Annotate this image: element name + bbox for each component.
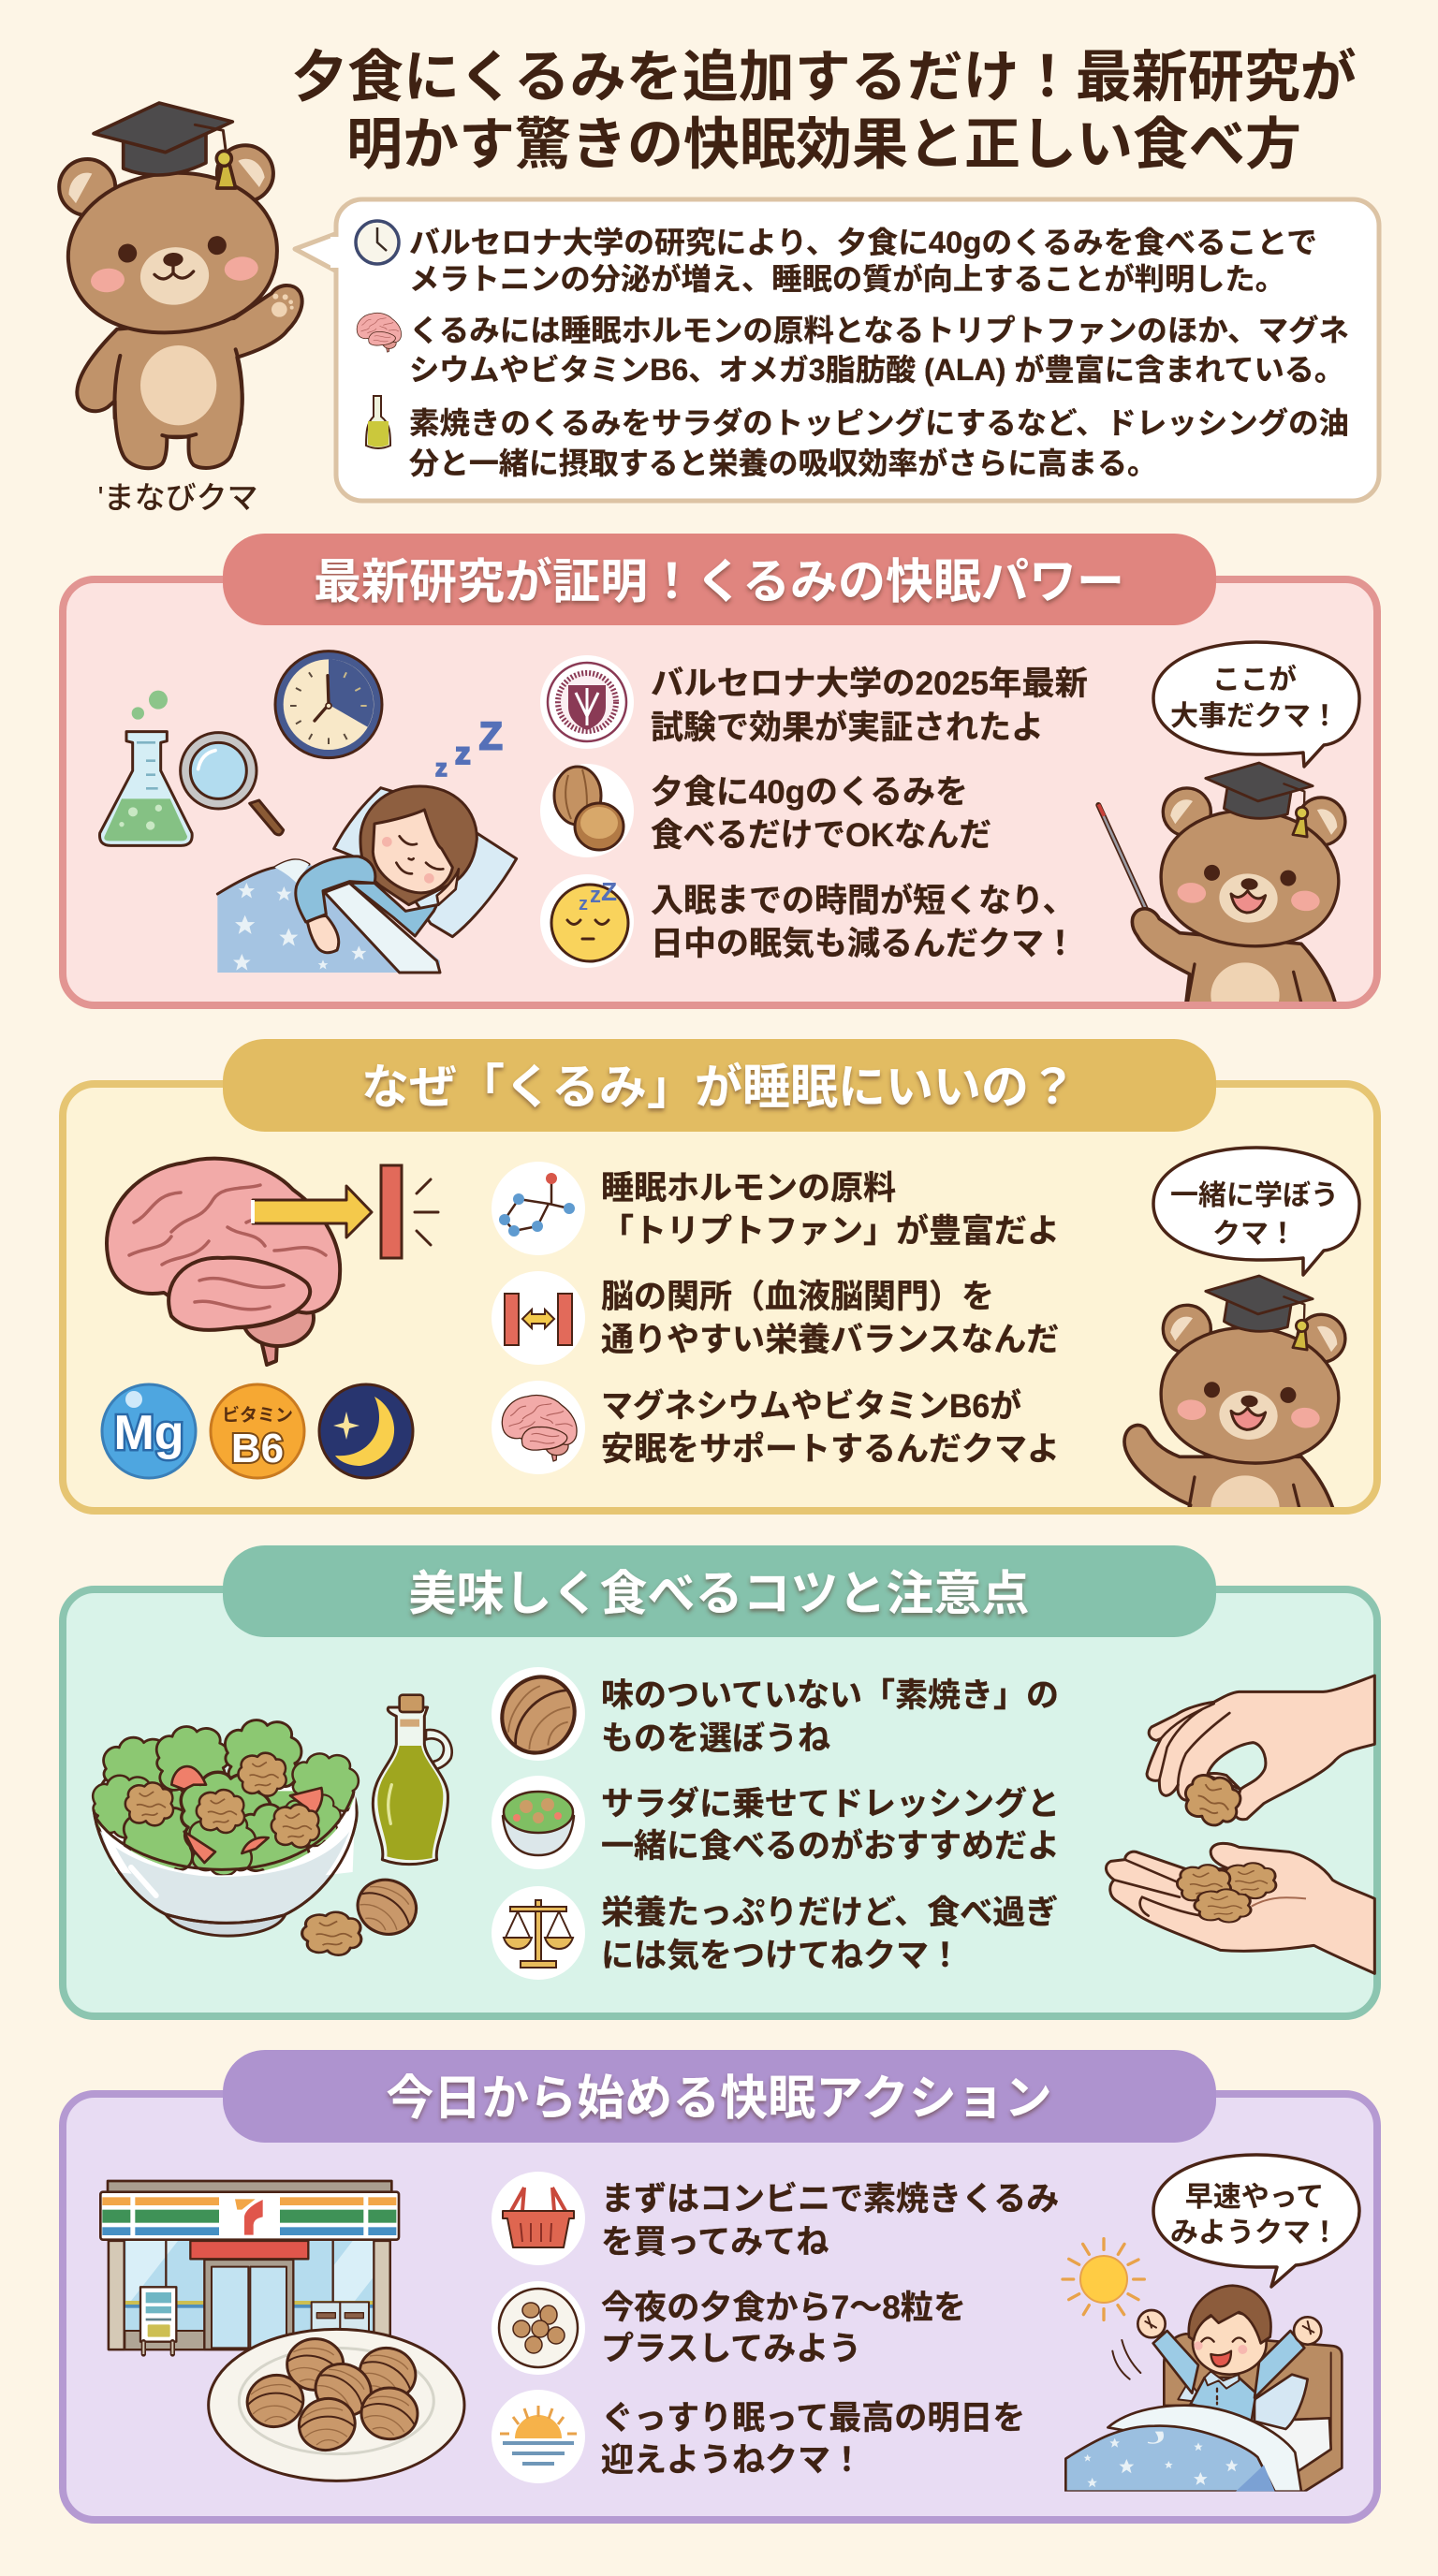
- item: do not overeat: 栄養たっぷりだけど、食べ過ぎ: [601, 1895, 1058, 1931]
- item: great tomorrow: 迎えようねクマ！: [601, 2442, 863, 2479]
- speech bubble: 一緒に学ぼうクマ: 一緒に学ぼう: [1170, 1180, 1339, 1211]
- illustration: waking boy with sun and bed: [1061, 2239, 1342, 2499]
- summary text: くるみには睡眠ホルモンの原料となるトリプトファンのほか、マグネ: [409, 314, 1349, 347]
- item: magnesium: [492, 1381, 1060, 1474]
- illustration: brain: [107, 1159, 340, 1365]
- item: university: バルセロナ大学の2025年最新: [651, 666, 1088, 702]
- item: buy at convenience store: まずはコンビニで素焼きくるみ: [601, 2181, 1059, 2217]
- item: do not overeat: には気をつけてねクマ！: [601, 1938, 961, 1974]
- arrow to barrier: [253, 1186, 372, 1237]
- barrier: [381, 1165, 438, 1258]
- illustration: sleeping person: z: [455, 737, 471, 771]
- title: 夕食にくるみを追加するだけ！最新研究が: [291, 46, 1357, 109]
- item: blood brain barrier: 通りやすい栄養バランスなんだ: [601, 1322, 1059, 1358]
- icon: sleepy face: z: [590, 883, 601, 908]
- icon: clock: [356, 221, 399, 264]
- heading: 最新研究が証明！くるみの快眠パワー: [314, 555, 1124, 608]
- panel: 今日から始める快眠アクション: [63, 2050, 1377, 2520]
- heading: 美味しく食べるコツと注意点: [408, 1567, 1030, 1620]
- icon: vitamin B6: B6: [231, 1426, 284, 1471]
- speech bubble: 一緒に学ぼうクマ: [1153, 1148, 1359, 1275]
- illustration: sleeping person: Z: [479, 715, 503, 758]
- icon: Mg: Mg: [113, 1406, 184, 1460]
- item: add 7-8 walnuts: 今夜の夕食から7〜8粒を: [601, 2290, 966, 2326]
- item: unroasted: [489, 1663, 1059, 1766]
- panel: 美味しく食べるコツと注意点: [63, 1545, 1377, 2016]
- speech bubble: ここが大事だクマ: 大事だクマ！: [1170, 701, 1339, 732]
- title: 明かす驚きの快眠効果と正しい食べ方: [346, 113, 1301, 176]
- mascot name: 'まなびクマ: [97, 480, 258, 515]
- speech bubble: 一緒に学ぼうクマ: クマ！: [1212, 1219, 1297, 1250]
- item: with salad: [492, 1776, 1060, 1869]
- item: university: 試験で効果が実証されたよ: [651, 710, 1044, 746]
- icon: small brain: [502, 1396, 577, 1461]
- speech bubble: 早速やってみようクマ: みようクマ！: [1170, 2217, 1339, 2248]
- summary text: シウムやビタミンB6、オメガ3脂肪酸 (ALA) が豊富に含まれている。: [409, 353, 1344, 387]
- icon: plate small: [499, 2289, 578, 2367]
- item: walnut 40g: [540, 764, 991, 857]
- item: magnesium: マグネシウムやビタミンB6が: [601, 1388, 1021, 1425]
- summary text: バルセロナ大学の研究により、夕食に40gのくるみを食べることで: [409, 226, 1317, 259]
- illustration: salad bowl: [93, 1720, 359, 1936]
- summary text: メラトニンの分泌が増え、睡眠の質が向上することが判明した。: [409, 262, 1285, 296]
- icon: vitamin B6: ビタミン: [222, 1405, 293, 1426]
- item: unroasted: 味のついていない「素焼き」の: [601, 1677, 1059, 1714]
- mascot: まなびクマ waving: [57, 103, 302, 468]
- mascot: bear with pointer: [1095, 762, 1347, 1002]
- heading: [223, 1039, 1216, 1132]
- illustration: walnuts: [302, 1872, 424, 1955]
- item: buy at convenience store: を買ってみてね: [601, 2224, 829, 2261]
- illustration: sleeping person: z: [435, 755, 448, 782]
- item: blood brain barrier: [492, 1271, 1059, 1365]
- illustration: flask: [99, 691, 192, 845]
- heading: [223, 1545, 1216, 1637]
- icon: basket: [503, 2188, 574, 2247]
- heading: [223, 534, 1216, 625]
- item: walnut 40g: 食べるだけでOKなんだ: [651, 817, 991, 854]
- summary text: 素焼きのくるみをサラダのトッピングにするなど、ドレッシングの油: [409, 406, 1349, 440]
- speech bubble: ここが大事だクマ: [1153, 642, 1359, 767]
- icon: sun: [1063, 2239, 1144, 2320]
- icon: sunrise: [500, 2406, 577, 2464]
- item: great tomorrow: ぐっすり眠って最高の明日を: [601, 2400, 1025, 2437]
- item: blood brain barrier: 脳の関所（血液脳関門）を: [601, 1279, 994, 1315]
- item: buy at convenience store: [492, 2172, 1059, 2265]
- illustration: sleeping person: [217, 715, 517, 973]
- mascot: bear waving: [1123, 1275, 1347, 1507]
- summary text: 分と一緒に摂取すると栄養の吸収効率がさらに高まる。: [409, 446, 1157, 480]
- icon: balance scale: [504, 1900, 573, 1968]
- icon: sleepy face: z: [579, 894, 588, 915]
- item: sleepiness: 入眠までの時間が短くなり、: [651, 883, 1076, 919]
- item: add 7-8 walnuts: プラスしてみよう: [601, 2331, 861, 2367]
- illustration: magnifying glass: [181, 733, 284, 835]
- icon: brain small: [357, 313, 402, 352]
- item: do not overeat: [492, 1886, 1058, 1980]
- icon: sleepy face: [551, 877, 628, 961]
- item: with salad: サラダに乗せてドレッシングと: [601, 1785, 1060, 1822]
- icon: vitamin B6: [211, 1384, 304, 1478]
- item: sleepiness: 日中の眠気も減るんだクマ！: [651, 926, 1077, 962]
- icon: molecule: [499, 1173, 575, 1237]
- panel: なぜくるみが睡眠にいいの: [63, 1039, 1377, 1541]
- item: university: [540, 655, 1088, 749]
- item: with salad: 一緒に食べるのがおすすめだよ: [601, 1828, 1060, 1865]
- heading: 今日から始める快眠アクション: [386, 2071, 1052, 2125]
- icon: Mg: [102, 1384, 196, 1478]
- icon: salad: [503, 1792, 574, 1855]
- icon: gate: [505, 1294, 572, 1345]
- speech bubble: 早速やってみようクマ: [1153, 2155, 1359, 2287]
- item: magnesium: 安眠をサポートするんだクマよ: [601, 1431, 1060, 1468]
- speech bubble: 早速やってみようクマ: 早速やって: [1185, 2182, 1324, 2213]
- item: unroasted: ものを選ぼうね: [601, 1720, 830, 1757]
- item: add 7-8 walnuts: [492, 2281, 966, 2375]
- illustration: hands with walnuts: [1106, 1676, 1374, 1973]
- illustration: plate of walnuts: [209, 2329, 464, 2481]
- icon: walnut: [489, 1663, 588, 1766]
- heading: なぜ「くるみ」が睡眠にいいの？: [361, 1061, 1077, 1114]
- icon: oil bottle: [366, 396, 390, 448]
- icon: sleepy face: Z: [601, 877, 617, 906]
- item: great tomorrow: [492, 2390, 1025, 2483]
- heading: [223, 2050, 1216, 2143]
- speech bubble: ここが大事だクマ: ここが: [1212, 664, 1297, 695]
- item: tryptophan: [492, 1162, 1060, 1255]
- title: [291, 46, 1357, 176]
- summary text: [409, 226, 1349, 480]
- illustration: convenience store: [100, 2181, 399, 2354]
- item: sleepiness: [540, 874, 1077, 968]
- panel: 最新研究が証明: [63, 534, 1377, 1028]
- item: walnut 40g: 夕食に40gのくるみを: [651, 774, 968, 811]
- illustration: olive oil bottle: [373, 1695, 452, 1865]
- panel: summary speech box: [295, 199, 1379, 501]
- icon: walnut half: [554, 767, 624, 850]
- item: tryptophan: 睡眠ホルモンの原料: [601, 1170, 896, 1207]
- item: tryptophan: 「トリプトファン」が豊富だよ: [601, 1213, 1060, 1250]
- illustration: clock: [275, 651, 382, 758]
- icon: university seal: [548, 663, 626, 741]
- icon: moon: [319, 1384, 413, 1478]
